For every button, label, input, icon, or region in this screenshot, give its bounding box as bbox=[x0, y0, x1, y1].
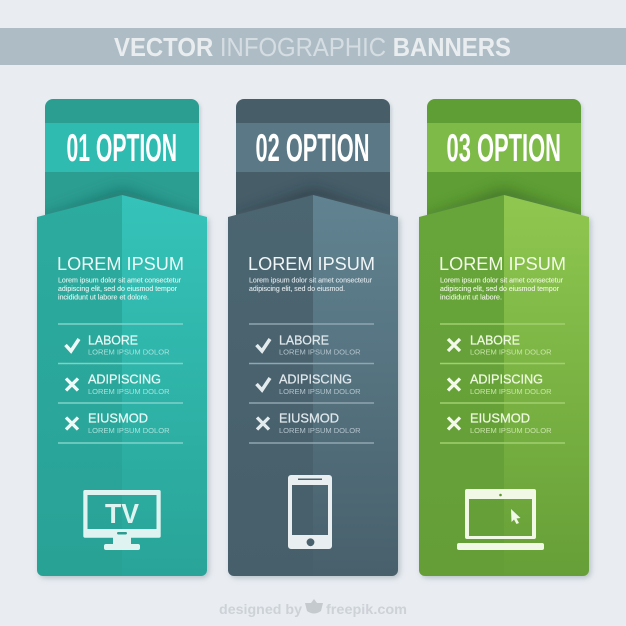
body text: adipiscing elit, sed do eiusmod tempor bbox=[58, 286, 178, 293]
row: adipiscing bbox=[279, 372, 361, 396]
row: eiusmod: EIUSMOD bbox=[88, 412, 148, 426]
row: adipiscing: LOREM IPSUM DOLOR bbox=[470, 387, 552, 396]
row: adipiscing: ADIPISCING bbox=[88, 372, 161, 386]
front panel bbox=[419, 195, 591, 578]
row: eiusmod: EIUSMOD bbox=[279, 412, 339, 426]
body text: adipiscing elit, sed do eiusmod. bbox=[249, 286, 345, 293]
row: adipiscing: LOREM IPSUM DOLOR bbox=[279, 387, 361, 396]
icon: cross bbox=[448, 339, 460, 351]
row: labore: LABORE bbox=[279, 333, 329, 347]
icon: check bbox=[66, 339, 79, 351]
icon: cross bbox=[448, 378, 460, 390]
footer credit: freepik.com bbox=[326, 601, 407, 617]
row: eiusmod bbox=[279, 412, 361, 435]
row: labore bbox=[470, 333, 552, 356]
option heading: 02 OPTION bbox=[256, 127, 370, 170]
row: labore: LOREM IPSUM DOLOR bbox=[88, 348, 170, 356]
body text bbox=[440, 277, 564, 302]
row: adipiscing bbox=[88, 372, 170, 396]
row: eiusmod bbox=[470, 412, 552, 435]
icon: laptop bbox=[457, 489, 544, 550]
panel: option 3 bbox=[419, 99, 591, 578]
heading: LOREM IPSUM bbox=[248, 253, 375, 274]
row: labore: LABORE bbox=[470, 333, 520, 347]
body text: adipiscing elit, sed do eiusmod tempor bbox=[440, 286, 560, 293]
icon: check bbox=[256, 339, 270, 351]
row: labore: LOREM IPSUM DOLOR bbox=[470, 348, 552, 356]
back tab bbox=[45, 99, 202, 216]
body text bbox=[58, 277, 182, 302]
footer credit: designed by bbox=[219, 602, 303, 617]
row: adipiscing bbox=[470, 372, 552, 396]
heading: LOREM IPSUM bbox=[439, 253, 566, 274]
title text: VECTOR INFOGRAPHIC BANNERS bbox=[114, 34, 511, 62]
body text: incididunt ut labore. bbox=[440, 294, 502, 302]
row: labore: LOREM IPSUM DOLOR bbox=[279, 348, 361, 356]
body text bbox=[249, 277, 373, 293]
icon: cross bbox=[66, 378, 78, 390]
row: adipiscing: ADIPISCING bbox=[470, 372, 543, 386]
footer credit bbox=[219, 599, 407, 617]
icon: cross bbox=[448, 418, 460, 430]
body text: Lorem ipsum dolor sit amet consectetur bbox=[58, 277, 182, 284]
option band bbox=[45, 123, 199, 172]
body text: Lorem ipsum dolor sit amet consectetur bbox=[249, 277, 373, 284]
front panel bbox=[228, 195, 400, 578]
feature list bbox=[58, 324, 183, 443]
row: eiusmod: EIUSMOD bbox=[470, 412, 530, 426]
icon: cross bbox=[66, 418, 78, 430]
row: adipiscing: LOREM IPSUM DOLOR bbox=[88, 387, 170, 396]
row: labore: LABORE bbox=[88, 333, 138, 347]
front panel bbox=[37, 195, 209, 578]
row: eiusmod: LOREM IPSUM DOLOR bbox=[470, 426, 552, 435]
title banner bbox=[0, 28, 626, 65]
body text: Lorem ipsum dolor sit amet consectetur bbox=[440, 277, 564, 284]
icon: phone bbox=[288, 475, 332, 549]
row: labore bbox=[88, 333, 170, 356]
row: eiusmod bbox=[88, 412, 170, 435]
icon: cross bbox=[257, 418, 269, 430]
option band bbox=[427, 123, 581, 172]
feature list bbox=[440, 324, 565, 443]
row: labore bbox=[279, 333, 361, 356]
icon: check bbox=[256, 378, 270, 390]
heading: LOREM IPSUM bbox=[57, 253, 184, 274]
row: eiusmod: LOREM IPSUM DOLOR bbox=[279, 426, 361, 435]
icon: tv: TV bbox=[105, 498, 139, 529]
icon: freepik logo bbox=[305, 599, 323, 614]
option heading: 01 OPTION bbox=[66, 127, 177, 170]
row: eiusmod: LOREM IPSUM DOLOR bbox=[88, 426, 170, 435]
feature list bbox=[249, 324, 374, 443]
icon: tv bbox=[83, 490, 161, 550]
back tab bbox=[427, 99, 584, 216]
panel: option 2 bbox=[228, 99, 400, 578]
option band bbox=[236, 123, 390, 172]
body text: incididunt ut labore et dolore. bbox=[58, 294, 149, 302]
row: adipiscing: ADIPISCING bbox=[279, 372, 352, 386]
back tab bbox=[236, 99, 393, 216]
panel: option 1 bbox=[37, 99, 209, 578]
